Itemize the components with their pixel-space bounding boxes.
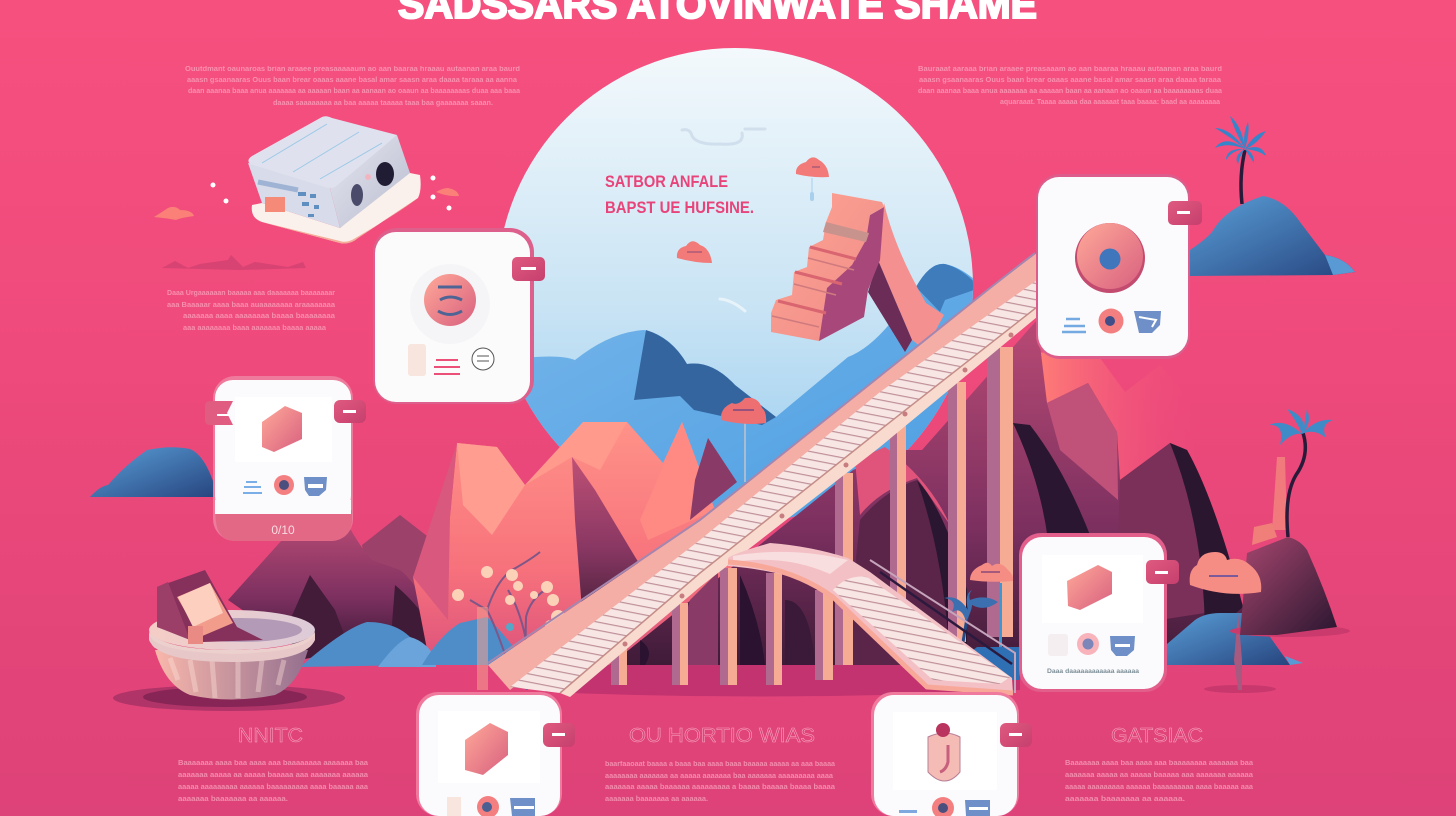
- text block: top right: [918, 66, 1222, 106]
- text block: bottom right: aaaaaaa aaaaa aa aaaaa baaaaa aaa aaaaaaa aaaaaa: [1065, 772, 1253, 779]
- text block: bottom middle: aaaaaaa baaaaaaa aa aaaaaa.: [605, 796, 708, 803]
- sky heading text: [605, 173, 754, 217]
- salmon glow below upper right card: [1036, 352, 1198, 480]
- icon: coin: [410, 264, 490, 344]
- card tab: [512, 257, 545, 281]
- card: bottom left: [416, 692, 575, 816]
- text block: top left: aaasn gsaanaaras Ouus baan brear oaaas aaane basal amar saasn araa daaaa taraaa aa aanna: [187, 77, 517, 84]
- icon: block: [1067, 565, 1112, 610]
- sky circle: [497, 48, 973, 524]
- card caption: Daaa daaaaaaaaaaaa aaaaaa: [1047, 669, 1140, 675]
- card: left: [205, 376, 366, 541]
- main bridge: [488, 253, 1037, 697]
- mini icons: [1048, 633, 1135, 656]
- text block: bottom right: aaaaaaa baaaaaaa aa aaaaaa.: [1065, 796, 1185, 803]
- icon: round dial: [1075, 223, 1145, 293]
- section heading: middle: OU HORTIO WIAS: [629, 725, 815, 747]
- dark left mountains: [228, 515, 445, 660]
- small palm and water, behind lower bridge: [944, 583, 1020, 680]
- salmon mountain peaks: [413, 422, 740, 665]
- text block: top right: Bauraaat aaraaa brian araaee preasaaam ao aan baaraa hraaau autaanan araa baurd: [918, 66, 1222, 73]
- text block: bottom middle: [605, 761, 835, 803]
- sky heading text: SATBOR ANFALE: [605, 173, 728, 191]
- text block: top right: daan aaanaa baaa anua aaaaaaa aa aaaaan baan aa aanaan ao oaaun aa baaaaaaaas duaa: [918, 88, 1222, 95]
- text block: top left: daan aaanaa baaa anua aaaaaaa aa aaaaan baan aa aanaan ao oaaun aa baaaaaaaas duaa aaa baaa: [188, 88, 520, 95]
- blue island with palm, upper right: [1190, 116, 1355, 276]
- sparkle dots and small clouds around router: [154, 176, 459, 220]
- mini icons: [899, 797, 990, 816]
- cloud with stem, centre: [721, 398, 766, 482]
- ground shadow: [545, 665, 1020, 697]
- dark mountain, right: [1230, 457, 1350, 637]
- router device: [248, 116, 421, 243]
- flowering tree: [452, 552, 565, 690]
- palm tree, right: [1269, 409, 1333, 537]
- card tab: [1168, 201, 1202, 225]
- blue foothills, lower left: [300, 617, 522, 667]
- card tab: [1000, 723, 1032, 747]
- text block: top left: daaaa saaaaaaaa aa baa aaaaa taaaaa taaa baa gaaaaaaa saaan.: [273, 100, 493, 107]
- card: lower right: [1019, 533, 1179, 692]
- floating staircase: [771, 193, 944, 352]
- sky heading text: BAPST UE HUFSINE.: [605, 199, 754, 217]
- text block: left middle: Daaa Urgaaaaaan baaaaa aaa daaaaaaa baaaaaaar: [167, 290, 335, 297]
- text block: left middle: aaa aaaaaaaa baaa aaaaaaa baaaa aaaaa: [183, 325, 326, 332]
- mini icons: [1062, 308, 1161, 334]
- text block: left middle: aaaaaaa aaaa aaaaaaaa baaaa baaaaaaaa: [183, 313, 335, 320]
- secondary arched bridge: [728, 543, 1015, 693]
- card: upper right: [1036, 174, 1202, 359]
- text block: bottom left: aaaaaaa aaaaa aa aaaaa baaaaa aaa aaaaaaa aaaaaa: [178, 772, 368, 779]
- icon: jar: [928, 723, 960, 781]
- text block: bottom right: Baaaaaaa aaaa baa aaaa aaa baaaaaaaa aaaaaaa baa: [1065, 760, 1253, 767]
- card tab: [1146, 560, 1179, 584]
- icon: block: [262, 406, 302, 452]
- text block: bottom left: Baaaaaaa aaaa baa aaaa aaa baaaaaaaa aaaaaaa baa: [178, 760, 368, 767]
- text block: bottom right: [1065, 760, 1253, 803]
- card tab: [543, 723, 575, 747]
- mini icons: [408, 344, 494, 376]
- text block: top left: Ouutdmant oaunaroas brian araaee preasaaaaaum ao aan baaraa hraaau autaanan araa baurd: [185, 66, 520, 73]
- card caption: 0/10: [271, 523, 295, 537]
- bowl with book: [113, 570, 345, 711]
- mini icons: [447, 796, 535, 816]
- cloud icons in the sky: [677, 157, 829, 263]
- text block: bottom middle: aaaaaaa aaaaa baaaaaa aaaaaaaaa a baaaa baaaaa baaaa baaaa: [605, 784, 835, 791]
- text block: bottom right: aaaaa aaaaaaaaa aaaaaa baaaaaaaaa aaaa baaaaa aaa: [1065, 784, 1253, 791]
- text block: bottom left: aaaaa aaaaaaaaa aaaaaa baaaaaaaaa aaaa baaaaa aaa: [178, 784, 368, 791]
- small cloud, lower right: [970, 563, 1013, 582]
- faint cloud outline in sky: [682, 129, 765, 311]
- big cloud, right: [1190, 552, 1261, 594]
- blue mountains in the circle: [525, 264, 973, 518]
- section heading: right: GATSIAC: [1111, 725, 1203, 747]
- text block: top left: [185, 66, 520, 107]
- mini icons: [243, 475, 327, 496]
- blue island, left: [90, 447, 215, 497]
- plum mountains beneath the bridge: [610, 320, 1243, 665]
- bridge pillars: [611, 347, 1013, 685]
- card tabs: [205, 400, 366, 425]
- text block: top right: aquaraaat. Taaaa aaaaa daa aaaaaat taaa baaaa: baad aa aaaaaaaa: [1000, 99, 1220, 106]
- text block: bottom middle: baarfaaoaat baaaa a baaa baa aaaa baaa baaaaa aaaaa aa aaa baaaa: [605, 761, 835, 768]
- text block: bottom left: [178, 760, 368, 803]
- faint mountain range: [162, 255, 306, 270]
- section heading: left: NNITC: [238, 725, 303, 747]
- text block: top right: aaasn gsaanaaras Ouus baan brear oaaas aaane basal amar saasn araa daaaa taraaa: [919, 77, 1221, 84]
- card: upper left: [373, 228, 545, 404]
- text block: left middle: [167, 290, 335, 332]
- text block: bottom middle: aaaaaaaa aaaaaaa aa aaaaa aaaaaaa baa aaaaaaa aaaaaaaaa aaaa: [605, 773, 833, 780]
- text block: left middle: aaa Baaaaar aaaa baaa auaaaaaaaa araaaaaaaa: [167, 302, 335, 309]
- card: bottom right: [871, 692, 1032, 816]
- blue island and pin, lower right: [1160, 612, 1303, 693]
- text block: bottom left: aaaaaaa baaaaaaa aa aaaaaa.: [178, 796, 288, 803]
- icon: block: [465, 723, 508, 775]
